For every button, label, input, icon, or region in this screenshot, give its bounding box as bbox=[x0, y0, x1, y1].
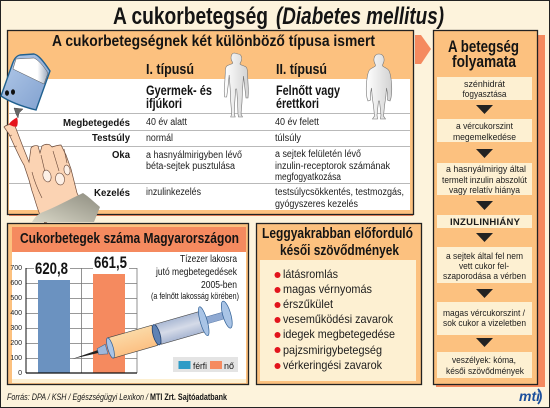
legend: férfi bbox=[193, 361, 207, 372]
step texts: megemelkedése bbox=[453, 132, 516, 143]
column: type I: normál bbox=[146, 133, 173, 144]
table background bbox=[9, 79, 410, 210]
step texts: a vércukorszint bbox=[456, 121, 513, 132]
panel: two types of diabetes bbox=[8, 30, 414, 216]
column: type I: Gyermek- és bbox=[146, 83, 212, 98]
title: A cukorbetegség bbox=[113, 3, 268, 30]
step texts: sok cukor a vizeletben bbox=[443, 318, 526, 329]
row labels: Megbetegedés bbox=[63, 117, 130, 129]
step texts: fogyasztása bbox=[462, 89, 507, 100]
panel: process of the disease bbox=[434, 30, 545, 387]
chart note: (a felnőtt lakosság körében) bbox=[151, 291, 239, 301]
step texts bbox=[442, 79, 527, 377]
axis labels: 100 bbox=[10, 355, 22, 362]
axis labels: 700 bbox=[10, 265, 22, 272]
chart note: 2005-ben bbox=[201, 279, 237, 291]
bullet list: látásromlás bbox=[283, 267, 338, 281]
process heading bbox=[448, 37, 519, 71]
bullet list: érszűkület bbox=[283, 297, 334, 311]
complications heading: Leggyakrabban előforduló bbox=[262, 226, 413, 242]
icon: heavy person silhouette bbox=[366, 54, 392, 119]
step texts: a hasnyálmirigy által bbox=[446, 164, 526, 175]
title: (Diabetes mellitus) bbox=[276, 3, 444, 30]
value: women: 661,5 bbox=[94, 253, 127, 272]
axis labels: 300 bbox=[10, 325, 22, 332]
shirt cuff bbox=[32, 193, 100, 222]
blood drop bbox=[9, 118, 18, 127]
column: type I: 40 év alatt bbox=[146, 117, 187, 128]
column: type II: II. típusú bbox=[276, 62, 327, 78]
panel: most common late complications bbox=[256, 224, 422, 384]
step texts: termelt inzulin abszolút bbox=[442, 175, 527, 186]
column: type II: 40 év felett bbox=[275, 117, 319, 128]
column: type I: inzulinkezelés bbox=[146, 187, 201, 198]
column: type I: béta-sejtek pusztulása bbox=[146, 161, 235, 172]
panel heading: A cukorbetegségnek két különböző típusa ismert bbox=[52, 33, 376, 50]
bullet list: vérkeringési zavarok bbox=[283, 358, 383, 372]
column: type II: túlsúly bbox=[275, 133, 301, 144]
step texts: késői szövődmények bbox=[446, 366, 524, 377]
column: type II: testsúlycsökkentés, testmozgás, bbox=[275, 187, 404, 198]
row labels: Oka bbox=[112, 149, 130, 161]
step texts: szaporodása a vérben bbox=[443, 271, 526, 282]
column: type II: megfogyatkozása bbox=[275, 172, 341, 183]
chart note: jutó megbetegedések bbox=[155, 266, 238, 278]
column: type II bbox=[275, 62, 404, 210]
bar: women bbox=[93, 274, 125, 373]
arrow from types panel to process panel bbox=[415, 35, 431, 64]
step texts: INZULINHIÁNY bbox=[450, 217, 521, 228]
chart note bbox=[151, 253, 239, 301]
value: men: 620,8 bbox=[35, 259, 68, 278]
complications heading: késői szövődmények bbox=[280, 243, 400, 259]
axis labels: 200 bbox=[10, 340, 22, 347]
chart note: Tízezer lakosra bbox=[180, 253, 237, 265]
axis labels: 0 bbox=[18, 370, 22, 377]
column: type I: I. típusú bbox=[146, 62, 194, 78]
axis labels bbox=[10, 265, 22, 377]
step boxes bbox=[437, 77, 532, 378]
axis labels: 600 bbox=[10, 280, 22, 287]
bullet list: idegek megbetegedése bbox=[283, 327, 395, 341]
column: type II: a sejtek felületén lévő bbox=[275, 149, 361, 160]
row labels bbox=[63, 117, 130, 199]
bar chart bbox=[10, 253, 137, 377]
axis labels: 500 bbox=[10, 295, 22, 302]
legend: nő bbox=[224, 361, 234, 372]
row labels: Kezelés bbox=[94, 187, 130, 199]
fingernails bbox=[42, 165, 71, 186]
complications list box bbox=[260, 260, 416, 381]
column: type II: inzulin-receptorok számának bbox=[275, 161, 391, 172]
icon: hand with pricked finger bbox=[4, 118, 100, 223]
title bbox=[113, 3, 444, 30]
process heading: folyamata bbox=[452, 52, 516, 71]
step texts: vagy relatív hiánya bbox=[449, 185, 521, 196]
row labels: Testsúly bbox=[92, 132, 130, 144]
column: type I: a hasnyálmirigyben lévő bbox=[146, 150, 242, 161]
icon: slim person silhouette bbox=[224, 53, 248, 117]
chart heading bbox=[12, 227, 246, 252]
icon: syringe bbox=[68, 299, 235, 373]
bar: men bbox=[38, 280, 70, 373]
panel: number of diabetics in Hungary bbox=[8, 224, 248, 384]
column: type II: érettkori bbox=[276, 96, 319, 111]
legend bbox=[173, 357, 238, 372]
axis labels: 400 bbox=[10, 310, 22, 317]
bullet list: veseműködési zavarok bbox=[283, 312, 394, 326]
process heading: A betegség bbox=[448, 37, 519, 56]
column: type II: Felnőtt vagy bbox=[276, 83, 340, 98]
column: type II: gyógyszeres kezelés bbox=[275, 199, 358, 210]
step texts: szénhidrát bbox=[464, 79, 505, 90]
logo: mti: mti bbox=[519, 388, 541, 404]
step texts: veszélyek: kóma, bbox=[452, 355, 516, 366]
chart heading: Cukorbetegek száma Magyarországon bbox=[20, 231, 239, 247]
step texts: vett cukor fel- bbox=[459, 261, 509, 272]
bullet list: pajzsmirigybetegség bbox=[283, 343, 382, 357]
icon: blood glucose meter bbox=[1, 54, 50, 118]
bullet list bbox=[274, 267, 395, 372]
column: type I: ifjúkori bbox=[146, 96, 182, 111]
step arrows bbox=[476, 105, 493, 347]
step texts: a sejtek által fel nem bbox=[446, 251, 523, 262]
source line: Forrás: DPA / KSH / Egészségügyi Lexikon / MTI Zrt. Sajtóadatbank bbox=[7, 392, 228, 402]
column: type I bbox=[146, 62, 242, 198]
bullet list: magas vérnyomás bbox=[283, 282, 372, 296]
step texts: magas vércukorszint / bbox=[443, 308, 525, 319]
complications heading bbox=[262, 226, 413, 259]
